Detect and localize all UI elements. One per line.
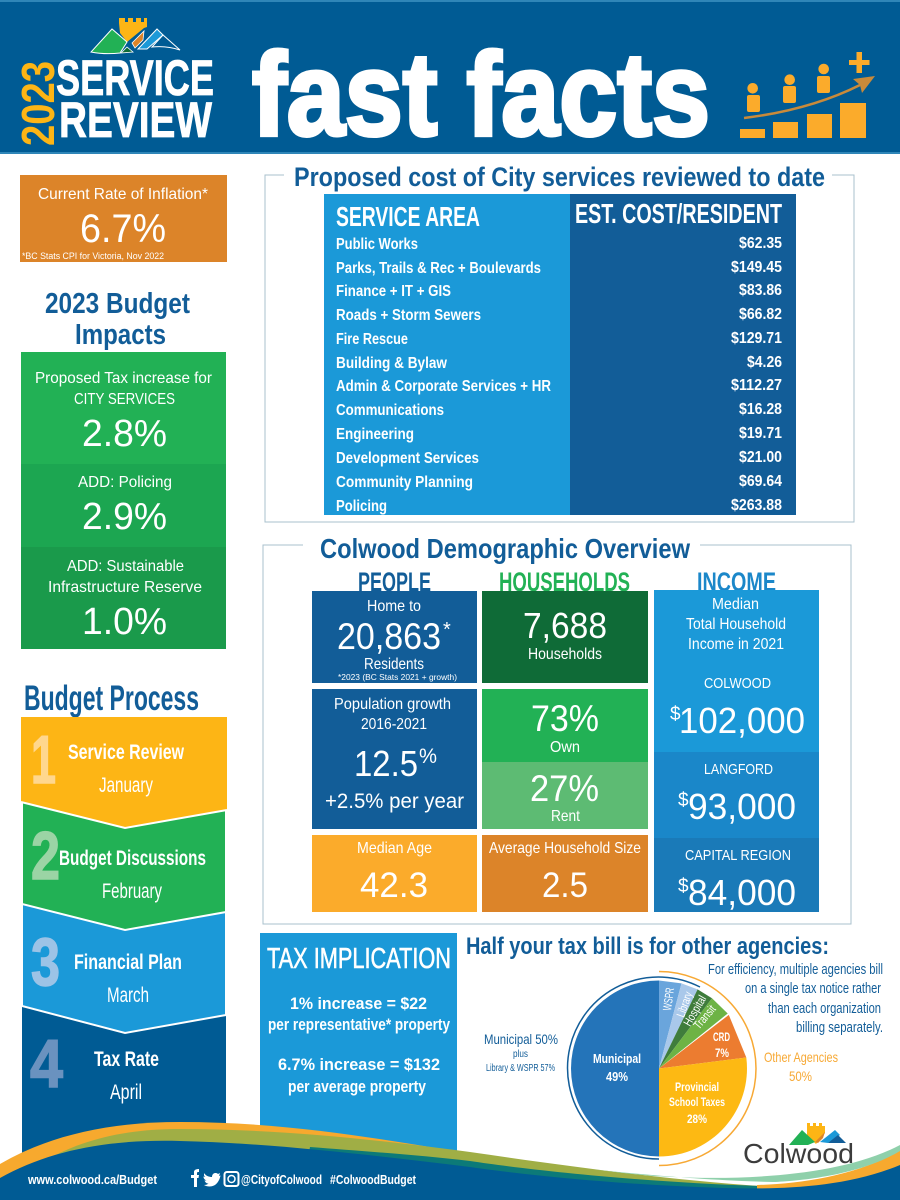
heading: budget process: Budget Process bbox=[24, 679, 199, 718]
panel: budget process steps: Service Review bbox=[68, 741, 185, 764]
panel: people: % bbox=[419, 745, 437, 768]
chart: tax bill pie: WSPR bbox=[660, 986, 677, 1011]
footer: website: www.colwood.ca/Budget bbox=[27, 1172, 158, 1187]
panel: budget process steps: Tax Rate bbox=[94, 1048, 159, 1071]
footer wave bbox=[0, 1122, 900, 1200]
heading: half your tax bill: Half your tax bill is for other agencies: bbox=[466, 933, 829, 960]
table: service costs: Communications bbox=[336, 402, 444, 419]
panel: budget process steps: 3 bbox=[31, 924, 60, 1000]
panel: people: * bbox=[443, 619, 451, 641]
panel: people: 2016-2021 bbox=[361, 716, 427, 733]
text: municipal share: Municipal 50% bbox=[484, 1031, 558, 1047]
table: service costs: Building & Bylaw bbox=[336, 355, 447, 372]
table: service costs: Public Works bbox=[336, 236, 418, 253]
logo: Colwood: Colwood bbox=[743, 1138, 854, 1169]
table: service costs bbox=[324, 194, 796, 515]
table: service costs: $19.71 bbox=[739, 425, 782, 442]
panel: income: Income in 2021 bbox=[688, 636, 784, 653]
table: service costs: $62.35 bbox=[739, 235, 782, 252]
panel: budget process steps: January bbox=[99, 774, 153, 797]
panel: income: $ bbox=[678, 876, 689, 897]
panel: budget impacts: ADD: Policing bbox=[78, 474, 172, 491]
table: service costs: $69.64 bbox=[739, 473, 782, 490]
table: service costs: $263.88 bbox=[731, 497, 782, 514]
panel: income: Total Household bbox=[686, 616, 786, 633]
chart: tax bill pie: Provincial bbox=[675, 1080, 719, 1094]
panel: income: CAPITAL REGION bbox=[685, 847, 791, 864]
panel: people: Residents bbox=[364, 656, 424, 673]
panel: budget impacts: 1.0% bbox=[82, 601, 167, 643]
panel: budget process steps: April bbox=[110, 1081, 142, 1104]
panel: households: 73% bbox=[531, 698, 599, 739]
panel: inflation bbox=[20, 175, 227, 262]
table: service costs: SERVICE AREA bbox=[336, 201, 480, 232]
header banner bbox=[0, 0, 900, 161]
heading: households: HOUSEHOLDS bbox=[499, 567, 630, 597]
chart: tax bill pie bbox=[568, 972, 756, 1166]
panel: people: 42.3 bbox=[360, 866, 428, 905]
panel: inflation: Current Rate of Inflation* bbox=[38, 186, 208, 203]
panel: income: $ bbox=[678, 790, 689, 811]
panel: budget process steps: 4 bbox=[30, 1026, 63, 1102]
panel: people: Median Age bbox=[357, 840, 432, 857]
text: other agencies: Other Agencies bbox=[764, 1049, 838, 1065]
panel: households: Rent bbox=[551, 808, 580, 825]
table: service costs: $149.45 bbox=[731, 259, 782, 276]
table: service costs: $4.26 bbox=[747, 354, 782, 371]
panel: budget impacts: 2.8% bbox=[82, 413, 167, 455]
heading: income: INCOME bbox=[697, 567, 776, 597]
chart: tax bill pie: Municipal bbox=[593, 1051, 641, 1066]
panel: people bbox=[312, 591, 477, 912]
panel: income: 93,000 bbox=[688, 786, 796, 827]
label: 2023: 2023 bbox=[12, 61, 64, 146]
heading: 2023 budget impacts: 2023 Budget bbox=[45, 288, 190, 320]
panel: budget process steps: Budget Discussions bbox=[59, 847, 206, 870]
panel: households: Households bbox=[528, 646, 602, 663]
panel: inflation: *BC Stats CPI for Victoria, Nov 2022 bbox=[22, 251, 164, 261]
panel: people: *2023 (BC Stats 2021 + growth) bbox=[338, 672, 457, 682]
panel: people: Home to bbox=[367, 598, 421, 615]
panel: budget process steps: 1 bbox=[31, 722, 56, 798]
panel: budget impacts: 2.9% bbox=[82, 496, 167, 538]
text: other agencies: 50% bbox=[789, 1068, 812, 1084]
panel: income: LANGFORD bbox=[704, 761, 773, 778]
panel: budget impacts: Infrastructure Reserve bbox=[48, 579, 202, 596]
table: service costs: EST. COST/RESIDENT bbox=[575, 198, 782, 229]
label: service: SERVICE bbox=[56, 50, 214, 106]
panel: households bbox=[482, 591, 648, 912]
title: fast facts: fast facts bbox=[252, 29, 710, 161]
text: municipal share: plus bbox=[513, 1049, 528, 1060]
logo: Colwood mountains and tower bbox=[91, 18, 180, 54]
panel: tax implication: TAX IMPLICATION bbox=[267, 943, 451, 975]
chart: tax bill pie: School Taxes bbox=[669, 1095, 725, 1109]
panel: income: $ bbox=[670, 704, 681, 725]
table: service costs: Finance + IT + GIS bbox=[336, 283, 451, 300]
panel: people: +2.5% per year bbox=[325, 790, 464, 813]
text: efficiency note bbox=[708, 961, 883, 1036]
panel: income: 84,000 bbox=[688, 872, 796, 913]
panel: income: 102,000 bbox=[679, 700, 805, 741]
icon: growth chart with people bbox=[740, 52, 875, 138]
heading: 2023 budget impacts bbox=[45, 288, 190, 351]
panel: tax implication bbox=[260, 933, 457, 1168]
panel: income: Median bbox=[712, 596, 759, 613]
panel: tax implication: per representative* property bbox=[268, 1015, 450, 1034]
panel: budget impacts bbox=[21, 352, 226, 649]
icons: social media bbox=[191, 1169, 238, 1187]
table: service costs: Fire Rescue bbox=[336, 331, 408, 348]
chart: tax bill pie: Library bbox=[674, 990, 695, 1019]
text: municipal share: Library & WSPR 57% bbox=[486, 1063, 555, 1074]
panel: households: 27% bbox=[530, 768, 599, 809]
table: service costs: $66.82 bbox=[739, 306, 782, 323]
chart: tax bill pie: 49% bbox=[606, 1069, 628, 1084]
label: review: REVIEW bbox=[59, 92, 213, 148]
footer: hashtag: #ColwoodBudget bbox=[330, 1172, 417, 1187]
panel: budget impacts: ADD: Sustainable bbox=[67, 558, 184, 575]
panel: households: 7,688 bbox=[523, 605, 607, 646]
table: service costs: $112.27 bbox=[731, 377, 782, 394]
title: demographic overview: Colwood Demographic Overview bbox=[320, 533, 690, 564]
table: service costs: $16.28 bbox=[739, 401, 782, 418]
table: service costs: Admin & Corporate Services + HR bbox=[336, 378, 551, 395]
panel: people: 20,863 bbox=[337, 616, 441, 657]
panel: tax implication: per average property bbox=[288, 1077, 426, 1096]
panel: households: Own bbox=[550, 739, 580, 756]
panel: budget impacts: Proposed Tax increase for bbox=[35, 370, 213, 387]
table: service costs: Policing bbox=[336, 498, 387, 515]
panel: tax implication: 1% increase = $22 bbox=[290, 994, 427, 1013]
table: service costs: Community Planning bbox=[336, 474, 473, 491]
chart: tax bill pie: Hospital bbox=[680, 993, 709, 1028]
chart: tax bill pie: Transit bbox=[691, 1002, 719, 1032]
panel: income bbox=[654, 590, 819, 913]
table: service costs: $21.00 bbox=[739, 449, 782, 466]
panel: budget process steps bbox=[21, 717, 227, 1170]
panel: people: 12.5 bbox=[354, 743, 418, 784]
table: service costs: Roads + Storm Sewers bbox=[336, 307, 481, 324]
text: other agencies bbox=[764, 1049, 838, 1084]
chart: tax bill pie: 28% bbox=[687, 1112, 707, 1126]
panel: people: Population growth bbox=[334, 696, 451, 713]
table: service costs: $129.71 bbox=[731, 330, 782, 347]
footer: handle: @CityofColwood bbox=[241, 1172, 322, 1187]
panel: inflation: 6.7% bbox=[80, 207, 166, 251]
logo: Colwood bbox=[743, 1123, 854, 1169]
heading: people: PEOPLE bbox=[358, 567, 431, 597]
heading: 2023 budget impacts: Impacts bbox=[75, 319, 166, 351]
panel: budget process steps: February bbox=[102, 880, 162, 903]
panel: households: Average Household Size bbox=[489, 840, 641, 857]
chart: tax bill pie: CRD bbox=[713, 1030, 730, 1044]
panel: households: 2.5 bbox=[542, 866, 588, 905]
table: service costs: $83.86 bbox=[739, 282, 782, 299]
panel: budget process steps: Financial Plan bbox=[74, 951, 182, 974]
panel: budget impacts: CITY SERVICES bbox=[74, 391, 175, 408]
panel: income: COLWOOD bbox=[704, 675, 771, 692]
panel: tax implication: 6.7% increase = $132 bbox=[278, 1055, 440, 1074]
table: service costs: Parks, Trails & Rec + Boulevards bbox=[336, 260, 541, 277]
table: service costs: Engineering bbox=[336, 426, 414, 443]
title: proposed cost: Proposed cost of City services reviewed to date bbox=[294, 162, 825, 192]
table: service costs: Development Services bbox=[336, 450, 479, 467]
chart: tax bill pie: 7% bbox=[715, 1046, 729, 1060]
panel: budget process steps: March bbox=[107, 984, 149, 1007]
panel: budget process steps: 2 bbox=[31, 818, 60, 894]
text: municipal share bbox=[484, 1031, 558, 1074]
